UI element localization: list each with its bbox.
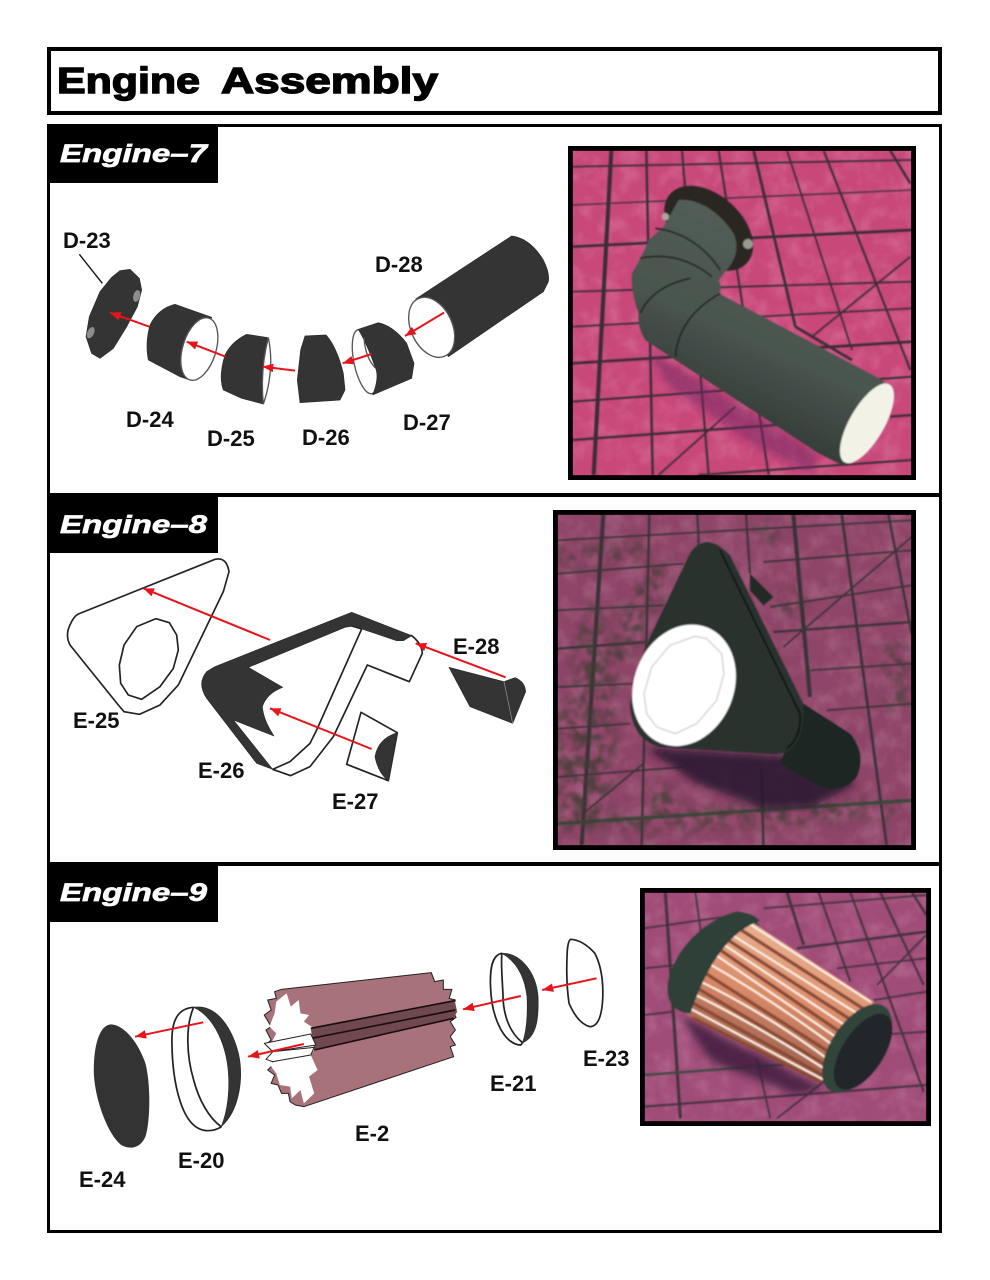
label E-27: E-27 (332, 789, 378, 814)
assembly arrows (135, 978, 597, 1057)
leader line for D-23 (79, 254, 102, 283)
part E-24: end cap (94, 1024, 149, 1148)
assembly arrows (143, 588, 506, 749)
label E-28: E-28 (453, 634, 499, 659)
label D-24: D-24 (126, 407, 174, 432)
label E-23: E-23 (583, 1046, 629, 1071)
part E-27 (347, 712, 397, 781)
label E-25: E-25 (73, 708, 119, 733)
label D-23: D-23 (63, 228, 111, 253)
label E-24: E-24 (79, 1167, 126, 1192)
part D-23: disk (85, 269, 142, 358)
heading tab: Engine-7 (49, 125, 218, 183)
exploded diagram: duct parts D-23 to D-28 (79, 236, 549, 404)
heading tab: Engine-8 (49, 496, 218, 553)
part E-28 (449, 667, 526, 723)
panel: Engine-8 (48, 496, 940, 864)
part D-24 (147, 304, 225, 385)
panel: Engine-9 (48, 864, 940, 1232)
assembly arrows (110, 313, 444, 371)
photo detail: dark paint smudges on mat (553, 520, 913, 838)
label D-26: D-26 (302, 425, 350, 450)
part E-20: ring (172, 1007, 241, 1131)
photo: assembled intake housing (553, 510, 916, 850)
part E-26: shell (202, 612, 422, 776)
heading tab: Engine-7: Engine–7 (60, 140, 208, 168)
part D-25 (221, 334, 271, 404)
photo: assembled elbow duct (568, 146, 916, 480)
title (49, 49, 940, 113)
label E-21: E-21 (490, 1071, 536, 1096)
photo: assembled air filter (640, 888, 931, 1126)
panel: Engine-7 (48, 125, 940, 494)
part E-23: plate (567, 939, 603, 1027)
heading tab: Engine-9: Engine–9 (60, 879, 207, 907)
heading tab: Engine-8: Engine–8 (60, 511, 207, 539)
label D-28: D-28 (375, 252, 423, 277)
part D-26 (297, 335, 345, 403)
exploded diagram: intake parts E-25 to E-28 (67, 559, 526, 781)
title: Assembly (221, 60, 438, 101)
exploded diagram: filter parts E-2, E-20, E-21, E-23, E-24 (94, 939, 603, 1148)
title: Engine (57, 60, 200, 101)
part E-2: pleated filter (264, 973, 457, 1107)
label E-20: E-20 (178, 1148, 224, 1173)
label D-25: D-25 (207, 426, 255, 451)
part E-25: plate with opening (67, 559, 229, 714)
label E-26: E-26 (198, 758, 244, 783)
part E-21: ring (490, 953, 538, 1045)
part D-28: tube (400, 236, 549, 365)
label D-27: D-27 (403, 410, 451, 435)
part D-27 (347, 323, 414, 396)
heading tab: Engine-9 (49, 865, 218, 922)
label E-2: E-2 (355, 1121, 389, 1146)
